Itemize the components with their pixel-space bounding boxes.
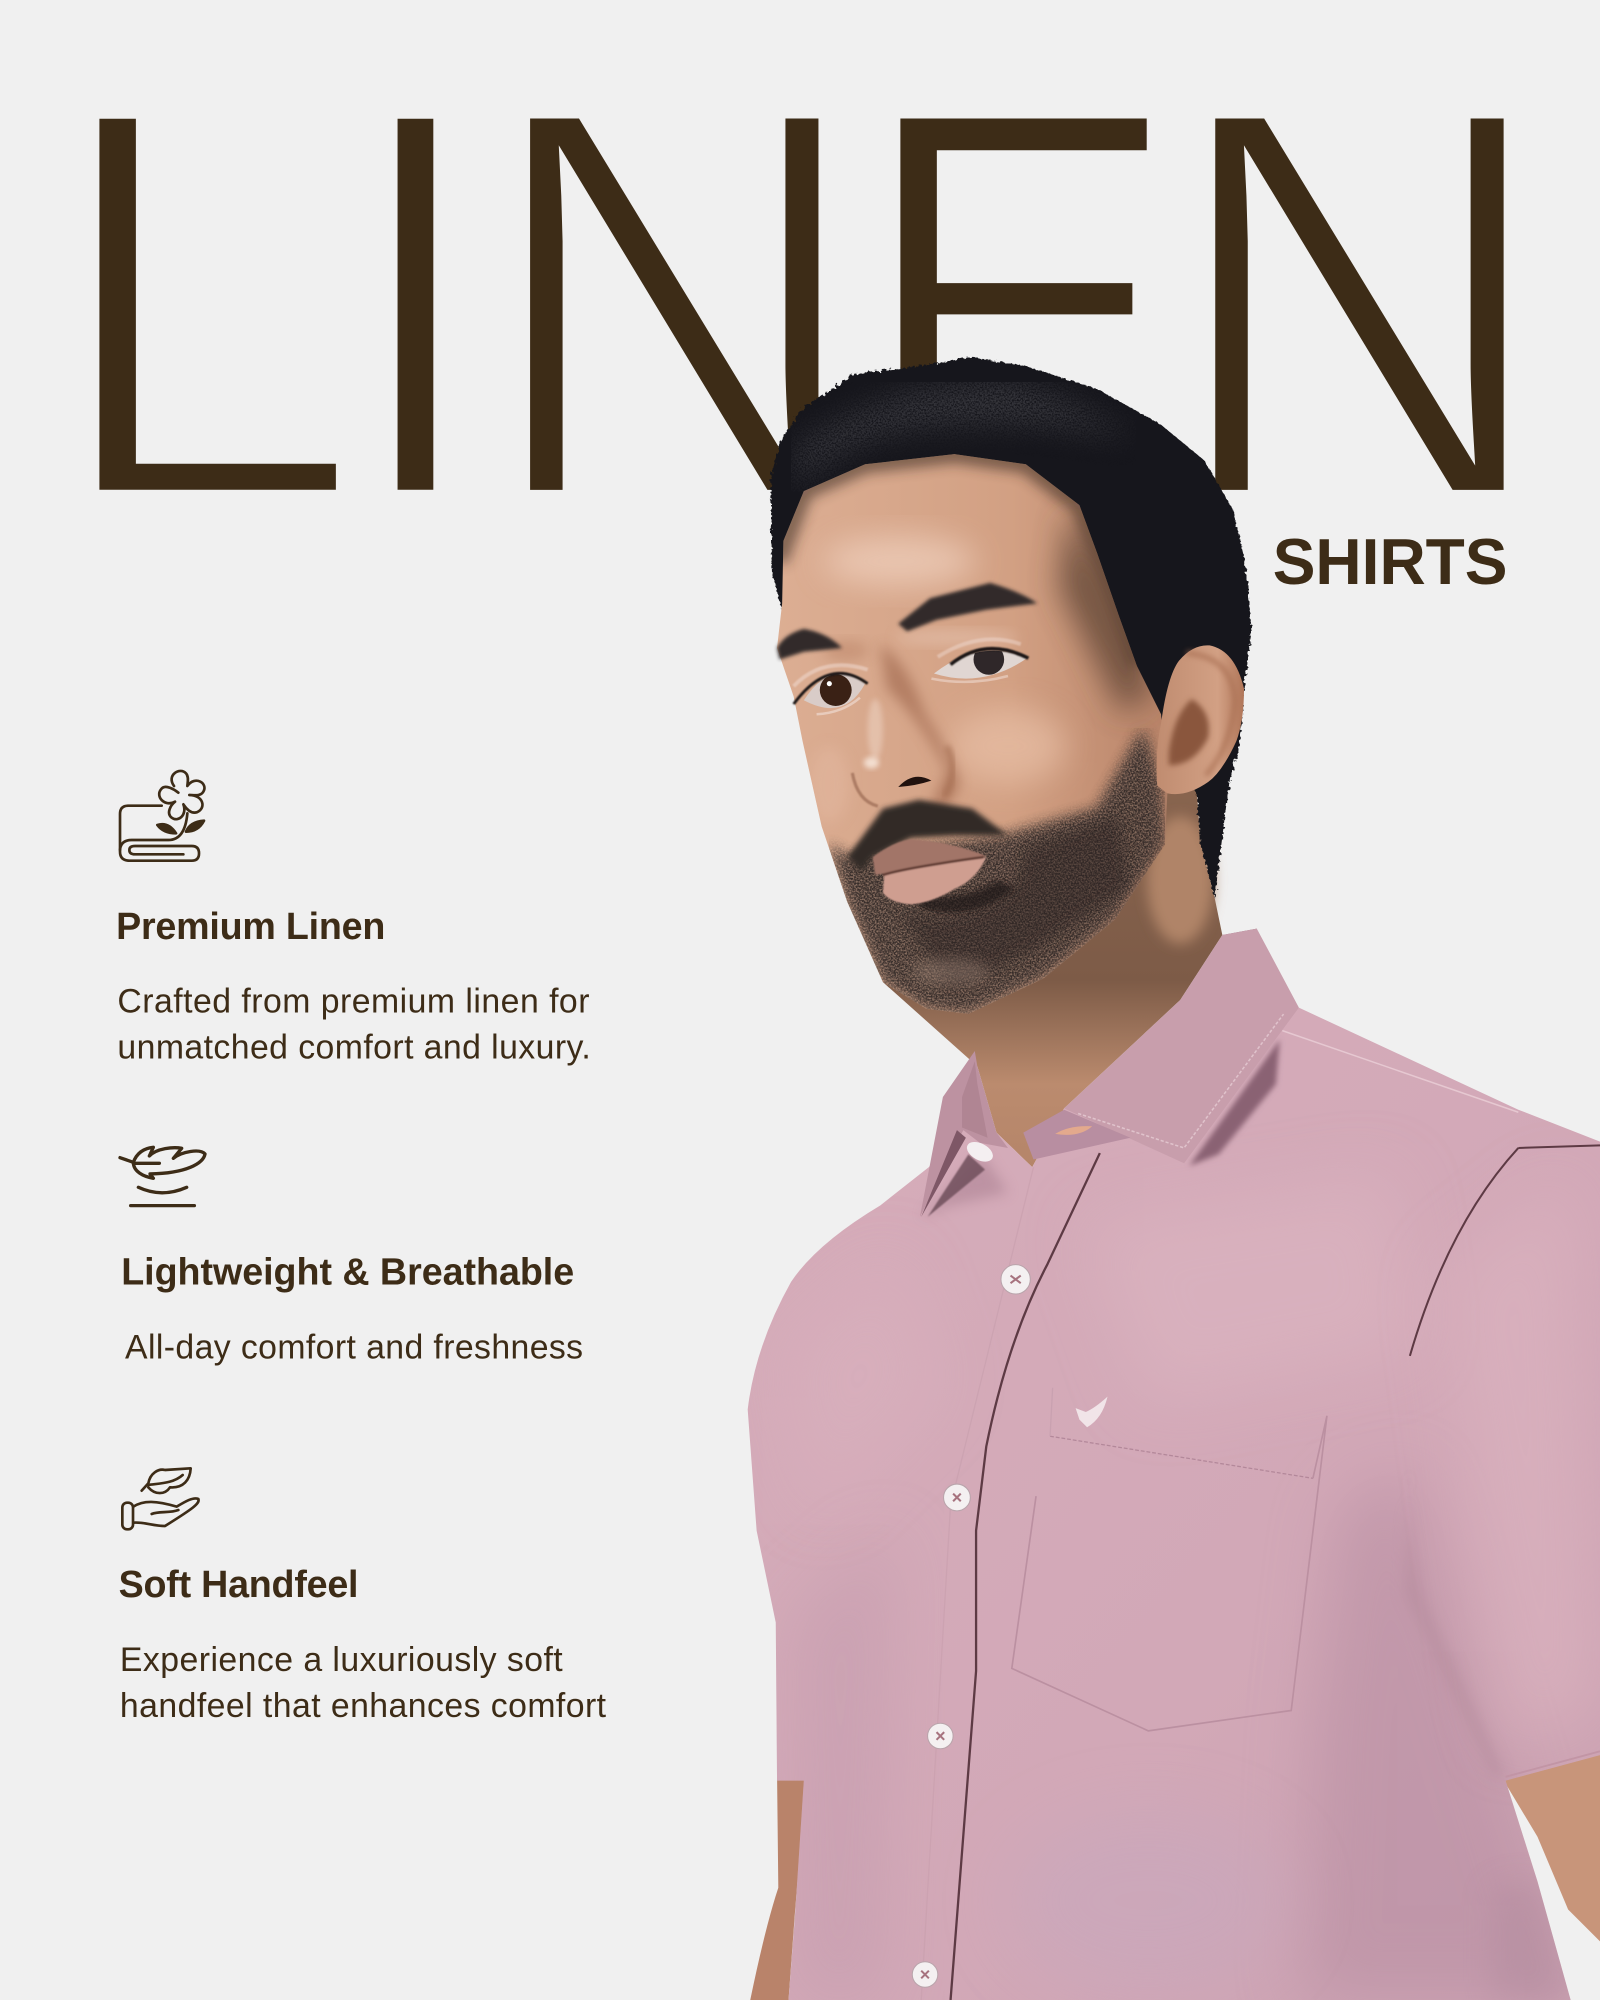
feature: Premium Linen — [116, 771, 591, 1067]
heading: Premium Linen — [116, 905, 385, 947]
beard — [829, 728, 1165, 1014]
shirt body — [748, 1008, 1600, 2000]
heading: Soft Handfeel — [119, 1563, 359, 1605]
heading: Lightweight & Breathable — [121, 1250, 574, 1292]
title: LINEN — [44, 0, 1554, 618]
shirt pocket — [1012, 1388, 1327, 1731]
subtitle: SHIRTS: SHIRTS — [1273, 525, 1507, 598]
description: Crafted from premium linen for — [117, 983, 589, 1021]
title: LINEN: E — [856, 0, 1182, 613]
feature: Soft Handfeel — [119, 1468, 607, 1725]
neck — [883, 753, 1222, 1167]
moustache — [847, 800, 1008, 871]
shirt shading — [778, 1040, 1600, 2000]
arms — [750, 1747, 1600, 2000]
hair — [771, 357, 1252, 898]
shirt seams and placket — [921, 1031, 1600, 2000]
description: handfeel that enhances comfort — [120, 1687, 607, 1725]
collar — [920, 929, 1299, 1217]
description: All-day comfort and freshness — [125, 1328, 583, 1366]
icon: towel with flower — [120, 771, 204, 861]
face — [777, 454, 1167, 1014]
description: Experience a luxuriously soft — [120, 1641, 563, 1679]
shirt logo — [1076, 1397, 1107, 1427]
eyes and brows — [777, 583, 1037, 714]
description: unmatched comfort and luxury. — [117, 1029, 591, 1067]
title: LINEN: I — [337, 0, 494, 618]
neck shading — [1147, 816, 1213, 944]
description — [117, 983, 591, 1067]
title: LINEN: L — [44, 0, 364, 618]
icon: feather — [120, 1147, 205, 1206]
feature: Lightweight & Breathable — [120, 1147, 583, 1366]
lips — [873, 839, 986, 904]
model photo illustration — [748, 357, 1600, 2000]
face shading — [778, 454, 1155, 823]
ear — [1157, 645, 1244, 794]
shirt buttons — [912, 1265, 1030, 1987]
icon: hand with leaf — [122, 1468, 199, 1529]
description — [120, 1641, 607, 1725]
title: LINEN: N — [1165, 0, 1554, 615]
title: LINEN: N — [480, 0, 868, 615]
